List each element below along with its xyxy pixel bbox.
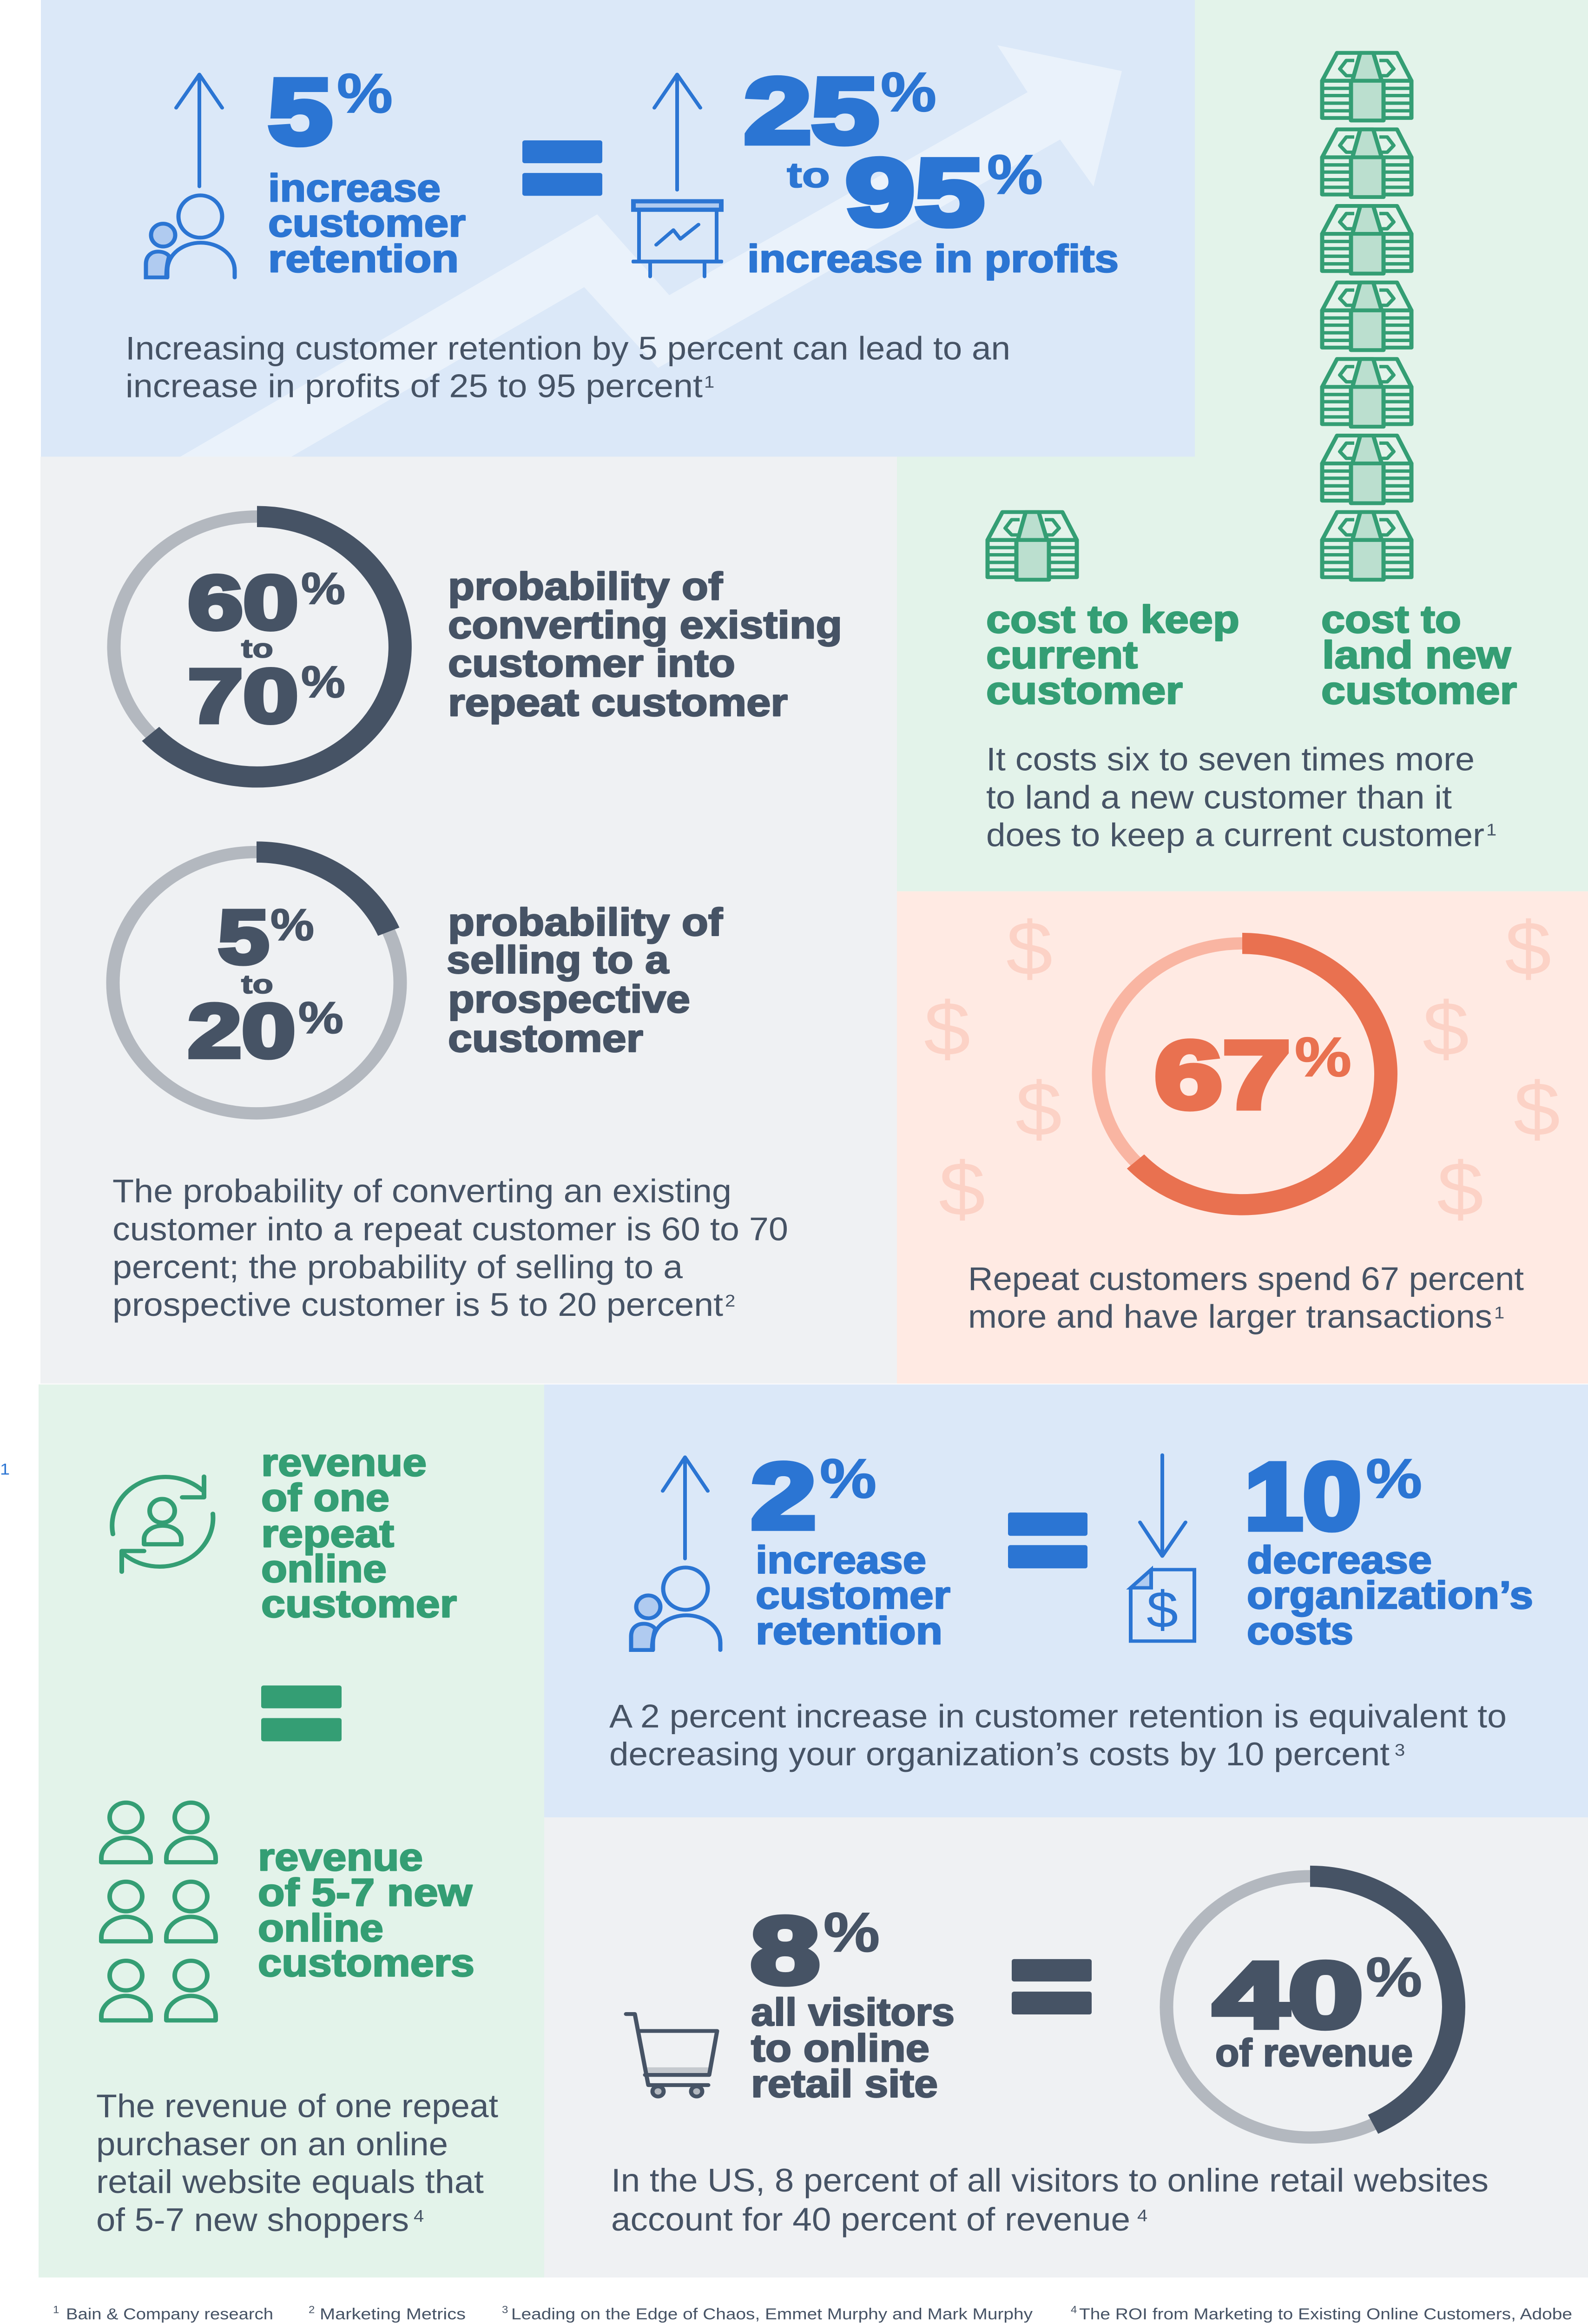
body text [96,2087,498,2238]
label: probability of selling [447,900,723,1060]
label: cost to keep current customer [986,597,1239,712]
body text: to land a new customer than it [986,779,1452,816]
stat: 25% to 95%: % [881,61,936,123]
label: probability of converting: repeat customer [448,680,788,724]
body text [609,1698,1507,1772]
label: decrease organization's costs: costs [1247,1609,1353,1652]
stat: 2%: % [820,1447,876,1510]
body text: 1 [704,373,714,392]
label: increase customer retention: increase [756,1538,926,1581]
equals sign [261,1685,342,1741]
body text: The probability of converting an existing [112,1173,731,1209]
icons: dollar signs [924,906,1560,1232]
body text: 3 [1395,1741,1405,1760]
stat: 5% to 20%: % [298,993,343,1043]
panel: 8 percent visitors [544,1817,1588,2278]
stat: 10%: % [1366,1447,1422,1510]
body text [968,1261,1524,1335]
icons: dollar signs: $ [1423,986,1469,1071]
icons: dollar signs: $ [1514,1067,1560,1152]
stat: 5%: % [337,62,393,125]
stat: 8% [751,1898,880,2004]
label: revenue of 5-7 new online customers: of 5-7 new [258,1870,473,1914]
body text [112,1173,788,1323]
label: revenue of one repeat online customer: customer [261,1582,457,1625]
stat: 5% to 20%: % [270,900,314,950]
icons: dollar signs: $ [1437,1147,1483,1232]
stat: 40% of revenue: 40 [1213,1943,1363,2047]
body text: does to keep a current customer [986,817,1484,853]
label: probability of selling: customer [448,1016,643,1060]
stat: 67%: 67 [1154,1021,1291,1128]
stray footnote marker: 1 [0,1460,10,1478]
label: decrease organization's costs: decrease [1247,1538,1432,1581]
stat: 40% of revenue [1213,1943,1422,2074]
icon: chart board [632,201,723,277]
label: all visitors to online retail site: retail site [751,2061,938,2106]
body text: more and have larger transactions [968,1298,1492,1335]
label: cost to land new customer: customer [1321,668,1517,712]
body text: Increasing customer retention by 5 percent can lead to an [125,330,1010,367]
label: revenue of one repeat online customer: of one [261,1475,389,1519]
body text: customer into a repeat customer is 60 to 70 [112,1211,788,1248]
body text: Repeat customers spend 67 percent [968,1261,1524,1297]
body text: 2 [725,1292,735,1311]
label: revenue of 5-7 new online customers: customers [258,1941,474,1984]
label: decrease organization's costs: organization’s [1247,1573,1533,1617]
stat: 25% to 95%: 95 [845,139,984,245]
icons: dollar signs: $ [1015,1067,1062,1152]
icon: invoice with dollar [1131,1570,1194,1641]
label: increase customer retention: retention [756,1609,942,1652]
stat: 5% to 20% [188,895,343,1074]
label: cost to land new customer: cost to [1321,597,1461,641]
panel: probabilities [40,457,897,1384]
label: all visitors to online retail site [751,1990,955,2106]
icons: dollar signs: $ [1006,906,1053,991]
stat: 60% to 70%: % [301,564,345,614]
icon: stacks of money for new customer [1322,53,1411,580]
equals sign [1008,1512,1087,1568]
panel: 2 percent retention [544,1385,1588,1817]
label: revenue of 5-7 new online customers: online [258,1906,383,1950]
stat: 60% to 70%: 70 [188,654,298,739]
stat: 5% [268,59,393,164]
equals sign [1012,1959,1092,2014]
stat: 25% to 95%: 25 [744,59,879,163]
footnotes [53,2304,1572,2323]
icon: stack of money for current customer [988,512,1077,580]
stat: 60% to 70%: to [241,634,273,663]
label: all visitors to online retail site: to online [751,2026,929,2070]
label: cost to land new customer: land new [1322,633,1511,676]
label: probability of converting: customer into [448,641,735,685]
label: probability of selling: prospective [448,977,690,1021]
body text [125,330,1010,404]
body text [986,741,1496,853]
stat: 25% to 95%: % [987,143,1043,205]
stat: 2% [751,1444,876,1548]
stat: 67%: % [1295,1026,1351,1088]
stat: 10% [1245,1444,1422,1549]
stat: 10%: 10 [1245,1444,1361,1549]
label: increase customer retention [268,166,466,280]
body text: decreasing your organization’s costs by 10 percent [609,1736,1390,1772]
body text: 4 [1137,2206,1147,2225]
label: all visitors to online retail site: all visitors [751,1990,955,2034]
label: increase customer retention [756,1538,950,1652]
arrow up [663,1457,708,1558]
label: increase in profits: increase in profits [747,237,1119,280]
footnotes: 1 [53,2304,59,2315]
icon: invoice with dollar: $ [1147,1581,1178,1638]
body text: purchaser on an online [96,2126,448,2162]
stat: 8%: % [824,1901,880,1963]
label: probability of converting: converting existing [448,603,842,647]
body text: retail website equals that [96,2163,484,2200]
body text: increase in profits of 25 to 95 percent [125,367,703,404]
footnotes: Bain & Company research [66,2305,273,2323]
stat: 5%: 5 [268,59,332,164]
donut chart: 67 percent [1099,944,1386,1205]
body text: prospective customer is 5 to 20 percent [112,1286,723,1323]
label: increase customer retention: customer [756,1573,950,1617]
donut chart: 60 to 70 percent [114,516,400,777]
label: probability of converting: probability of [448,564,723,608]
body text: percent; the probability of selling to a [112,1248,683,1285]
label: probability of selling: probability of [448,900,723,944]
stat: 2%: 2 [751,1444,816,1548]
arrow down [1140,1455,1186,1556]
label: revenue of 5-7 new online customers: revenue [258,1835,423,1879]
footnotes: Marketing Metrics [320,2305,466,2323]
stat: 8%: 8 [751,1898,820,2004]
arrow up [654,74,700,190]
body text: account for 40 percent of revenue [611,2201,1130,2238]
label: increase customer retention: increase [268,166,441,210]
body text: A 2 percent increase in customer retention is equivalent to [609,1698,1507,1735]
icon: shopping cart [626,2014,717,2097]
icon: customers [631,1567,720,1650]
body text: In the US, 8 percent of all visitors to online retail websites [611,2162,1489,2199]
stat: 60% to 70%: 60 [188,560,298,645]
stat: 25% to 95%: to [787,155,830,195]
label: probability of converting [448,564,842,724]
donut chart: 40 percent of revenue [1166,1876,1454,2138]
body text: It costs six to seven times more [986,741,1475,778]
label: decrease organization's costs [1247,1538,1533,1652]
background rising arrow [180,45,1122,457]
label: revenue of one repeat online customer: online [261,1546,387,1590]
footnotes: The ROI from Marketing to Existing Online Customers, Adobe [1079,2305,1572,2323]
stat: 40% of revenue: of revenue [1215,2031,1413,2074]
panel: cost to keep vs land [897,0,1588,891]
label: revenue of 5-7 new online customers [258,1835,474,1984]
label: probability of selling: selling to a [447,938,669,981]
label: cost to keep current customer: customer [986,668,1183,712]
body text: of 5-7 new shoppers [96,2201,409,2238]
body text: 4 [414,2206,424,2225]
label: cost to keep current customer: cost to keep [986,597,1239,641]
footnotes: Leading on the Edge of Chaos, Emmet Murphy and Mark Murphy [511,2305,1033,2323]
footnotes: 3 [502,2304,508,2315]
stat: 60% to 70%: % [301,657,345,707]
label: cost to keep current customer: current [986,633,1138,676]
body text [611,2162,1489,2238]
stat: 60% to 70% [188,560,345,739]
stat: 25% to 95% [744,59,1043,245]
panel: revenue of repeat customer [39,1385,544,2278]
icon: six new customers [101,1802,216,2020]
body text: 1 [1494,1303,1504,1322]
label: cost to land new customer [1321,597,1517,712]
donut chart: 5 to 20 percent [113,852,400,1113]
panel: 5 percent retention [41,0,1195,457]
label: revenue of one repeat online customer: revenue [261,1440,427,1484]
label: increase customer retention: retention [268,237,459,280]
stat: 40% of revenue: % [1366,1946,1422,2008]
footnotes: 2 [309,2304,315,2315]
stat: 5% to 20%: to [241,970,273,999]
arrow up [176,74,222,186]
stat: 5% to 20%: 20 [188,989,296,1074]
body text: 1 [1486,820,1496,839]
icon: customers [146,195,235,277]
label: increase customer retention: customer [268,201,466,245]
label: revenue of one repeat online customer: repeat [261,1512,394,1555]
body text: The revenue of one repeat [96,2087,498,2124]
equals sign [522,140,602,196]
stat: 5% to 20%: 5 [218,895,269,980]
stat: 67% [1154,1021,1351,1128]
icons: dollar signs: $ [1505,906,1551,991]
panel: repeat customers spend more [897,891,1588,1384]
icons: dollar signs: $ [939,1147,985,1232]
footnotes: 4 [1071,2304,1077,2315]
icon: repeat customer cycle [112,1477,213,1572]
icons: dollar signs: $ [924,986,970,1071]
label: revenue of one repeat online customer [261,1440,457,1625]
